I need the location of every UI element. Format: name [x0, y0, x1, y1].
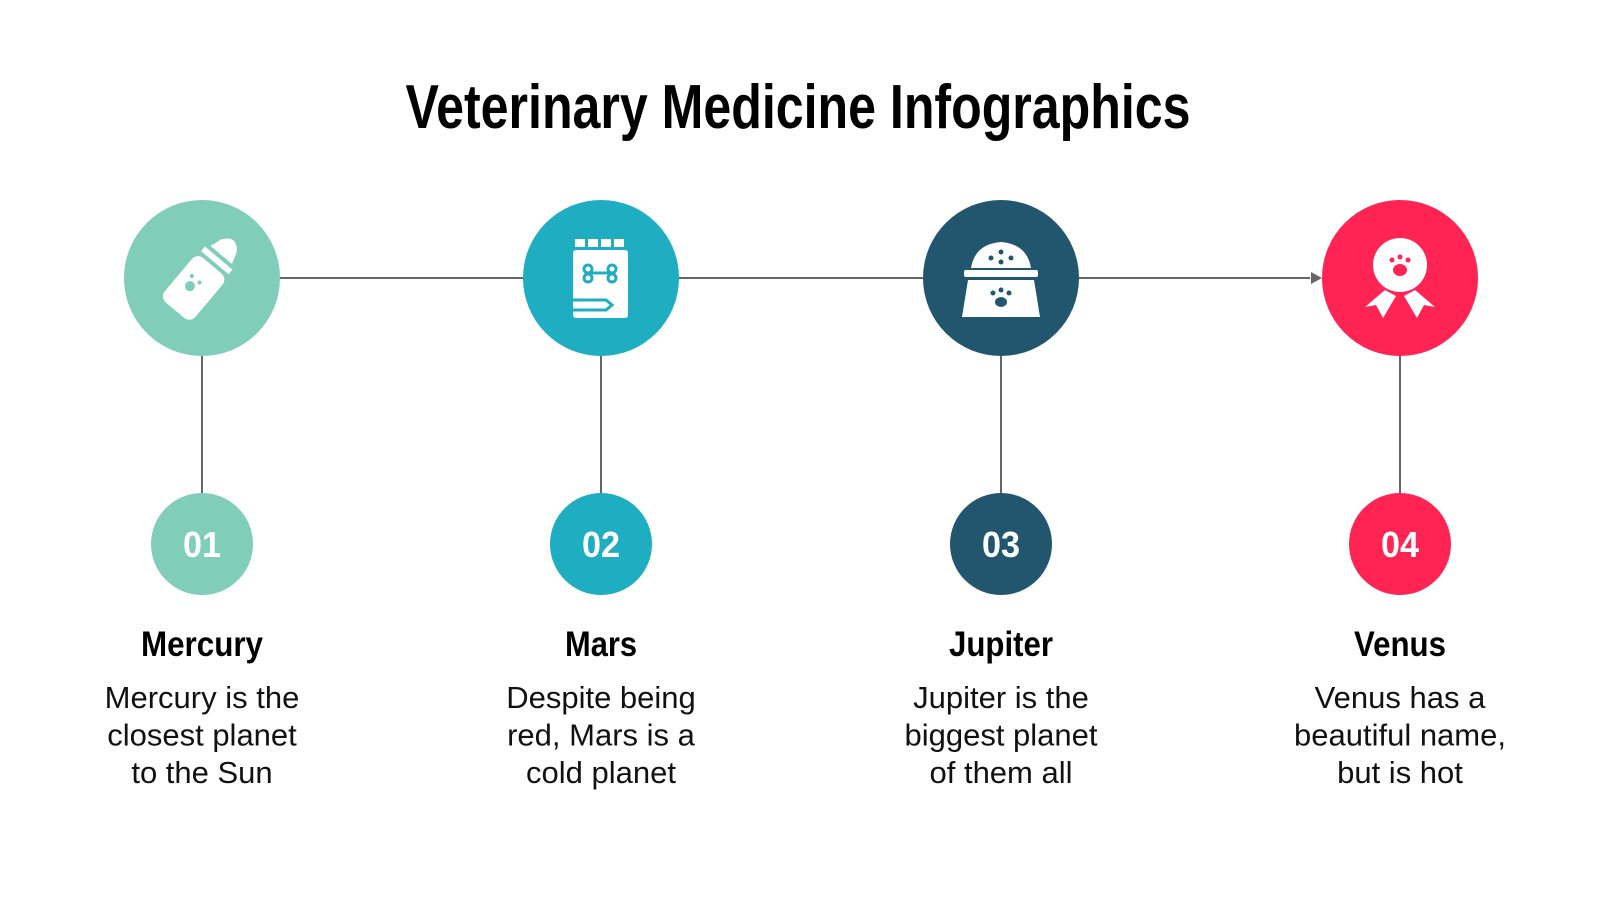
- icon: pet food bag: [523, 200, 679, 356]
- number badge 01: [151, 493, 253, 595]
- description: beautiful name,: [1294, 718, 1506, 752]
- heading Jupiter: Jupiter: [949, 625, 1053, 664]
- number badge 01: 01: [183, 524, 221, 565]
- number badge 04: [1349, 493, 1451, 595]
- number badge 03: 03: [982, 524, 1020, 565]
- step 3: Jupiter: [904, 200, 1098, 790]
- description: to the Sun: [131, 755, 273, 790]
- number badge 02: 02: [582, 524, 620, 565]
- description: red, Mars is a: [507, 718, 696, 752]
- number badge 03: [950, 493, 1052, 595]
- step 4: Venus: [1294, 200, 1506, 790]
- description: closest planet: [107, 718, 297, 752]
- description: of them all: [929, 755, 1073, 790]
- description: but is hot: [1337, 755, 1463, 790]
- heading Venus: Venus: [1354, 625, 1446, 664]
- icon: award rosette: [1322, 200, 1478, 356]
- icon: food bowl: [923, 200, 1079, 356]
- title: Veterinary Medicine Infographics: [406, 73, 1190, 142]
- description: Venus has a: [1315, 680, 1486, 715]
- number badge 02: [550, 493, 652, 595]
- description: Jupiter is the: [913, 680, 1089, 715]
- step 1: Mercury: [105, 200, 299, 790]
- heading Mercury: Mercury: [141, 625, 263, 664]
- description: Mercury is the: [105, 680, 299, 715]
- description: cold planet: [526, 755, 676, 790]
- step 2: Mars: [506, 200, 696, 790]
- number badge 04: 04: [1381, 524, 1419, 565]
- icon: baby bottle: [124, 200, 280, 356]
- connector line with arrow: [202, 272, 1400, 493]
- description: biggest planet: [904, 718, 1098, 752]
- heading Mars: Mars: [565, 625, 637, 664]
- description: Despite being: [506, 680, 696, 715]
